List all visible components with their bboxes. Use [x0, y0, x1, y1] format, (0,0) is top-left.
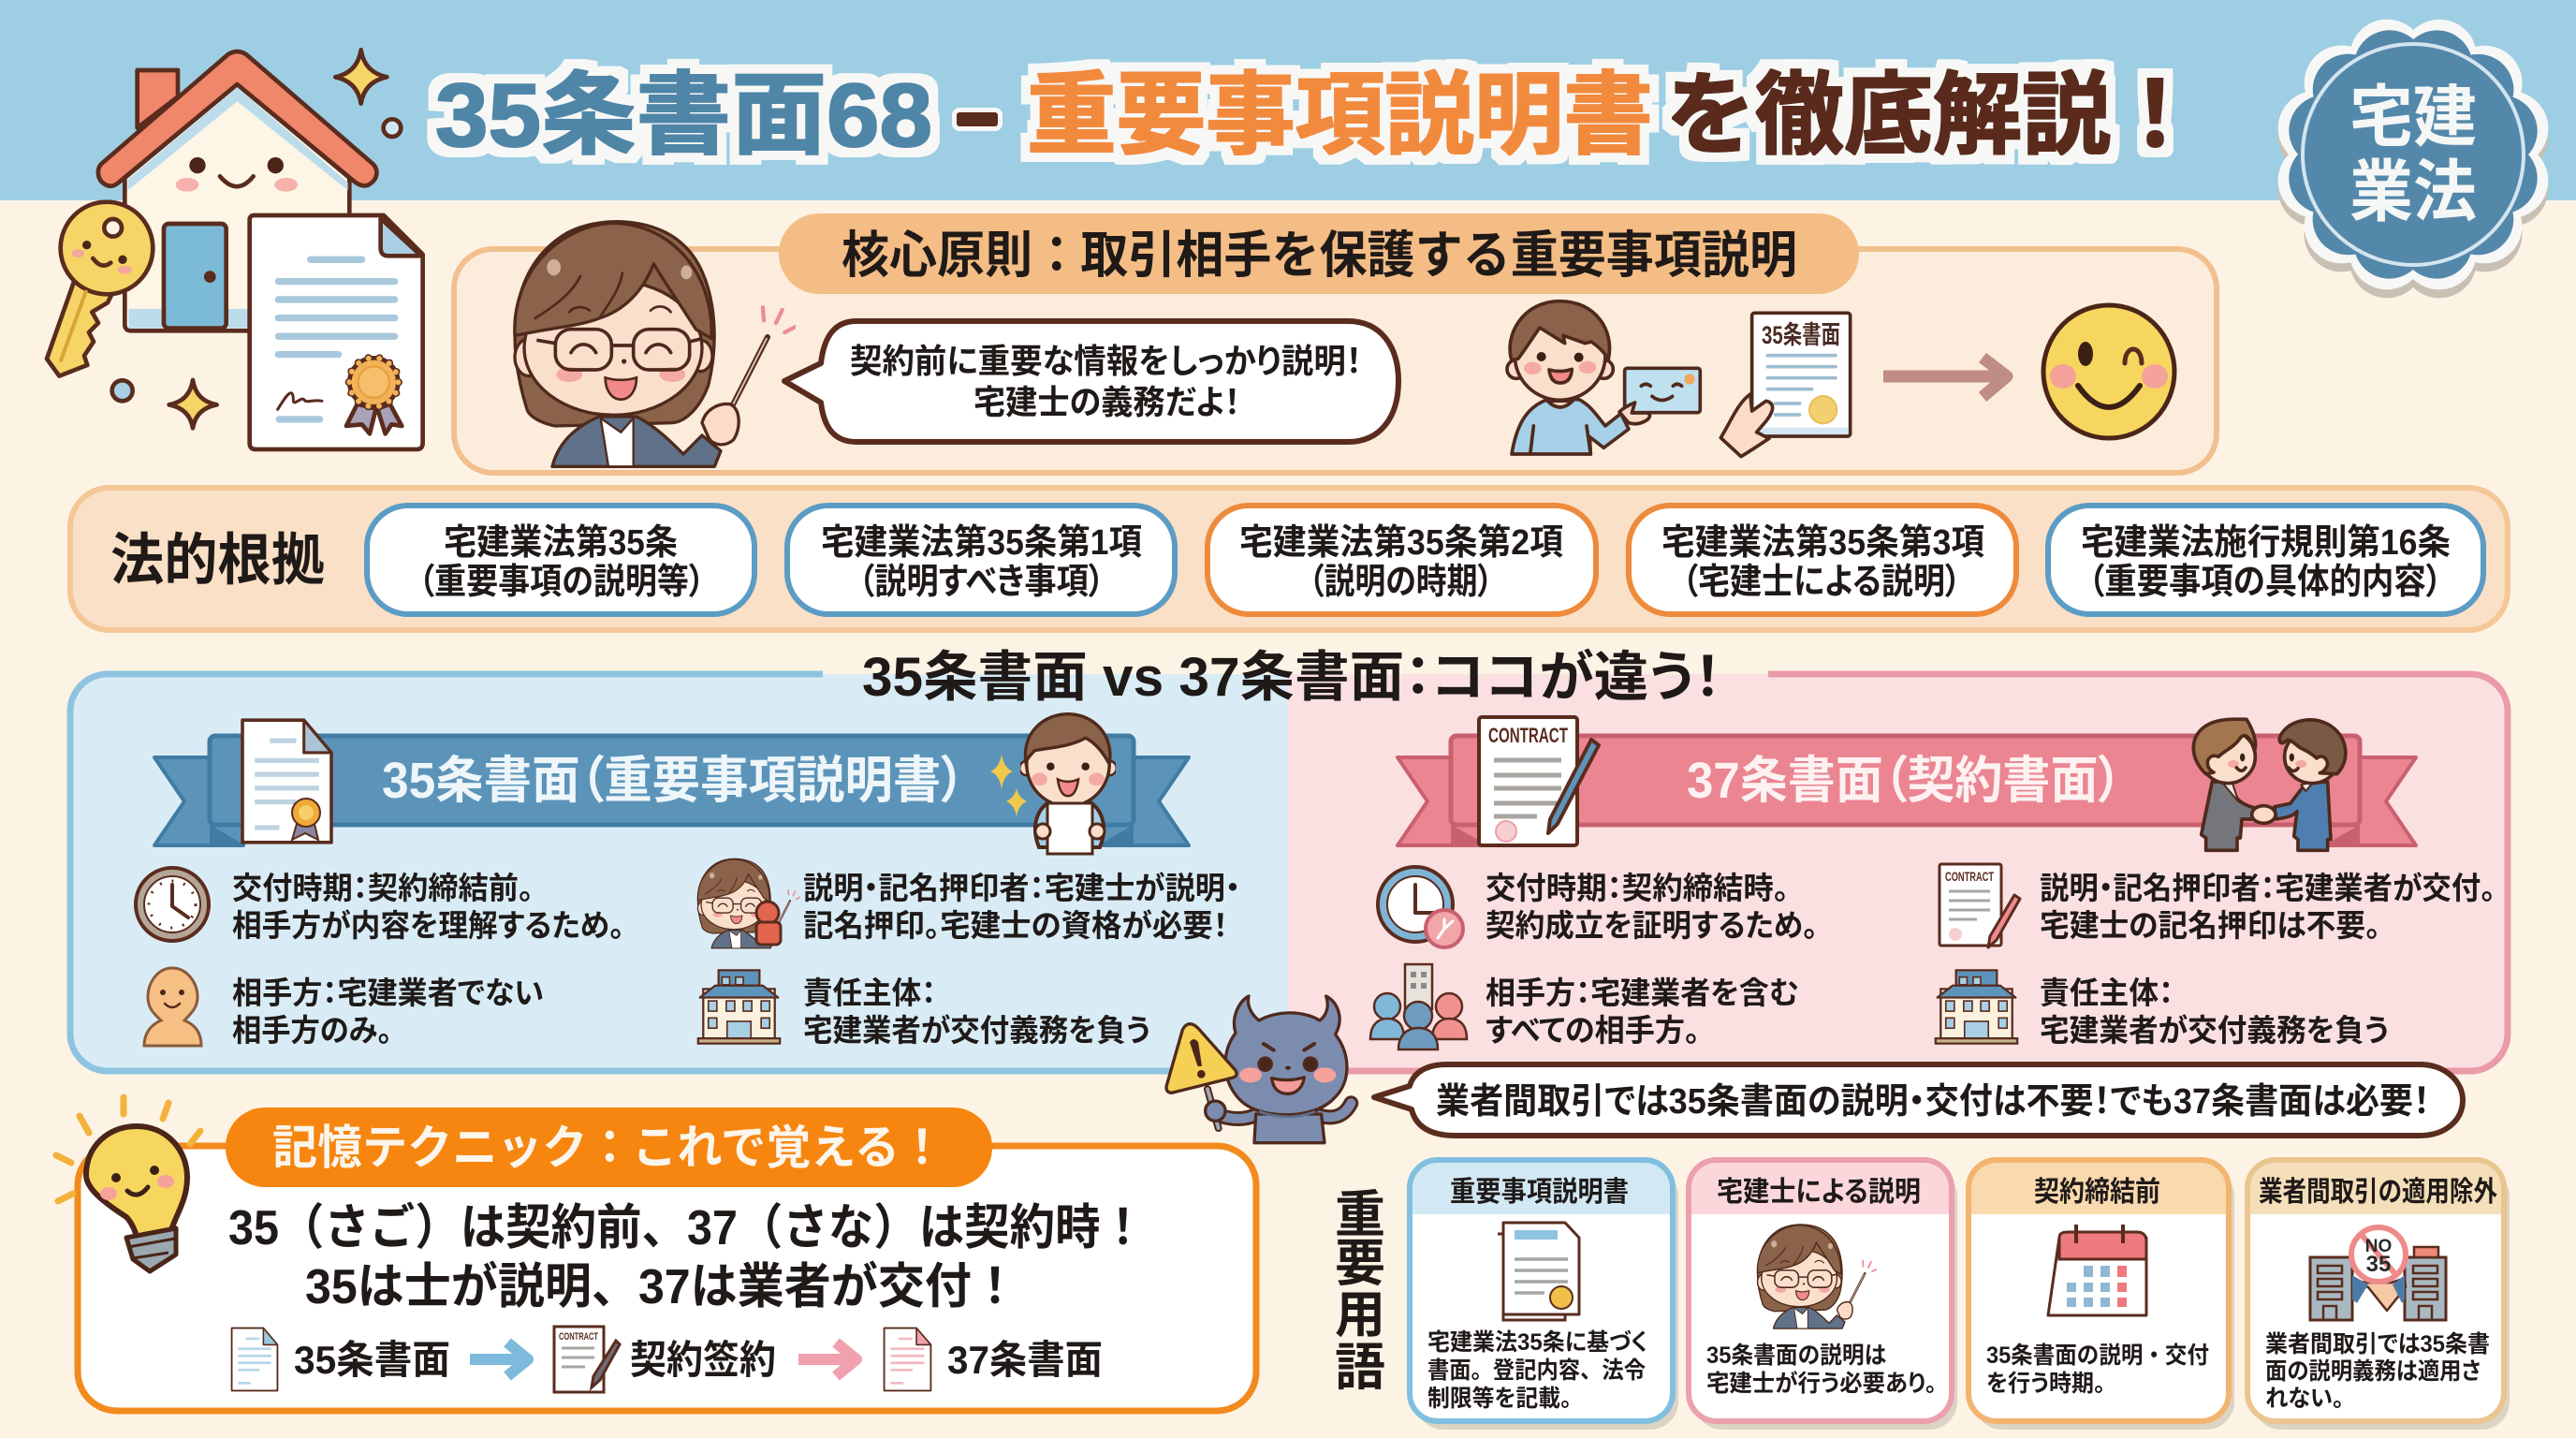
heading: comparison: 35条書面 vs 37条書面：ココが違う！ [862, 647, 1721, 708]
speech bubble: 宅建士の義務だよ！ [973, 383, 1240, 421]
icon: contract with pen [1479, 717, 1599, 845]
title: を徹底解説！ [1666, 66, 2200, 166]
text: definition: 制限等を記載。 [1427, 1386, 1572, 1412]
icon: document with rosette [242, 720, 331, 843]
icon: contract with pen: CONTRACT [559, 1331, 598, 1343]
speech bubble [784, 321, 1398, 442]
text: definition: 業者間取引では35条書 [2265, 1331, 2490, 1357]
card: 業者間取引の適用除外: 業者間取引の適用除外 [2259, 1177, 2497, 1208]
item: counterparty group: 相手方：宅建業者を含む [1486, 976, 1799, 1010]
sparkles [112, 50, 401, 428]
item: explainer and signer: 宅建士の記名押印は不要。 [2040, 908, 2380, 943]
icon: 37条書面 document [884, 1328, 932, 1391]
text: definition [1986, 1343, 2209, 1397]
card: 契約締結前 [1969, 1160, 2234, 1430]
chip: article 35-2 [1208, 506, 1596, 614]
panel: memory technique [78, 1108, 1256, 1411]
character: boy with paper [1019, 714, 1117, 854]
chip: article 35: 宅建業法第35条 [444, 523, 678, 563]
item: delivery timing [1378, 867, 1818, 947]
item: responsible party: 責任主体： [803, 976, 936, 1010]
chip: article 35-1: 宅建業法第35条第1項 [821, 523, 1142, 563]
character: teacher with pointer [515, 222, 796, 466]
text: mnemonic [228, 1201, 1146, 1314]
icon: light bulb [56, 1097, 200, 1271]
text: definition [2265, 1331, 2490, 1412]
icon: contract with pen: CONTRACT [1488, 724, 1568, 747]
chip: enforcement rule 16: （重要事項の具体的内容） [2088, 563, 2442, 602]
heading: key terms (vertical): 用 [1335, 1287, 1385, 1343]
character: handshake [2193, 719, 2346, 850]
chip: article 35-1: （説明すべき事項） [858, 563, 1105, 602]
arrow: blue [470, 1343, 528, 1376]
item: responsible party [698, 970, 1150, 1048]
icon: certificate document [250, 215, 423, 449]
title: 重要事項説明書 [1027, 66, 1653, 166]
item: responsible party: 責任主体： [2040, 976, 2174, 1010]
text: definition: 宅建業法35条に基づく [1427, 1329, 1647, 1356]
divider: center dashed line [1285, 689, 1291, 1002]
chip: article 35: （重要事項の説明等） [418, 563, 705, 602]
icon: smiling key [47, 202, 153, 376]
item: explainer and signer: 説明・記名押印者：宅建業者が交付。 [2040, 871, 2496, 905]
heading pill: core principle: 核心原則：取引相手を保護する重要事項説明 [842, 227, 1797, 284]
heading pill: memory technique [226, 1108, 992, 1187]
icon: contract with pen [554, 1327, 620, 1392]
item: delivery timing: 交付時期：契約締結前。 [232, 871, 534, 905]
icon: buildings, handshake and no-35 sign [2310, 1227, 2446, 1320]
text: definition: 宅建士が行う必要あり。 [1706, 1370, 1937, 1397]
icon: buildings, handshake and no-35 sign: 35 [2366, 1252, 2391, 1277]
text: definition: 書面。登記内容、法令 [1427, 1357, 1646, 1384]
icon: calendar [2048, 1225, 2146, 1315]
card: 契約締結前: 契約締結前 [2034, 1177, 2160, 1208]
card: 宅建士による説明: 宅建士による説明 [1717, 1177, 1921, 1208]
icon: official document [1498, 1223, 1579, 1320]
title: 35条書面68 [435, 66, 932, 166]
text: definition: れない。 [2265, 1386, 2344, 1412]
icon: 35条書面 document [230, 1328, 279, 1391]
chip: article 35-3 [1629, 506, 2016, 614]
icon: teacher [1757, 1225, 1877, 1328]
heading: key terms (vertical): 要 [1335, 1236, 1385, 1292]
panel: legal basis [70, 488, 2508, 630]
card: 宅建士による説明 [1689, 1160, 1957, 1430]
icon: smiley [2043, 305, 2174, 438]
header band [0, 0, 2576, 200]
chip: article 35-2: （説明の時期） [1309, 563, 1493, 602]
chip: article 35 [367, 506, 754, 614]
item: explainer and signer: 記名押印。宅建士の資格が必要！ [803, 908, 1228, 943]
speech bubble: 契約前に重要な情報をしっかり説明！ [850, 342, 1362, 380]
item: responsible party: 宅建業者が交付義務を負う [2040, 1013, 2389, 1048]
arrow: pink [798, 1343, 856, 1376]
flow: 35条書面 to contract to 37条書面: 契約签約 [630, 1338, 776, 1382]
text: definition [1427, 1329, 1647, 1412]
icon: 35条書面 document with hand: 35条書面 [1762, 321, 1840, 349]
item: counterparty: 相手方：宅建業者でない [232, 976, 544, 1010]
ribbon: 35条書面 heading: 35条書面（重要事項説明書） [382, 753, 965, 809]
item: counterparty: 相手方のみ。 [232, 1013, 392, 1048]
panel: 37条書面 [1288, 674, 2508, 1071]
item: responsible party [1936, 970, 2389, 1048]
item: delivery timing: 相手方が内容を理解するため。 [232, 908, 624, 943]
text: definition: 35条書面の説明・交付 [1986, 1343, 2209, 1369]
chip: article 35-1 [787, 506, 1175, 614]
text: mnemonic: 35（さご）は契約前、37（さな）は契約時！ [228, 1201, 1146, 1255]
card: 業者間取引の適用除外 [2247, 1160, 2510, 1430]
item: responsible party: 宅建業者が交付義務を負う [803, 1013, 1150, 1048]
badge: 宅建業法 seal: 業法 [2349, 155, 2477, 230]
badge: 宅建業法 seal [2277, 19, 2549, 290]
flow: 35条書面 to contract to 37条書面: 35条書面 [294, 1338, 450, 1382]
flow: 35条書面 to contract to 37条書面: 37条書面 [947, 1338, 1103, 1382]
icon: 35条書面 document with hand [1720, 313, 1851, 457]
ribbon: 35条書面 heading [154, 736, 1189, 845]
icon: buildings, handshake and no-35 sign: NO [2365, 1237, 2392, 1256]
heading: key terms (vertical): 重 [1335, 1187, 1385, 1243]
sparkles [990, 754, 1027, 816]
item: counterparty group [1370, 964, 1799, 1049]
item: delivery timing: 交付時期：契約締結時。 [1486, 871, 1789, 905]
heading: legal basis: 法的根拠 [110, 529, 325, 592]
text: definition: 面の説明義務は適用さ [2265, 1358, 2481, 1385]
heading: key terms (vertical): 語 [1335, 1340, 1385, 1396]
item: explainer and signer [697, 858, 1240, 948]
chip: article 35-3: 宅建業法第35条第3項 [1661, 523, 1984, 563]
panel: core principle [454, 213, 2217, 473]
callout: B2B exception: 業者間取引では35条書面の説明・交付は不要！でも37条書面は必要！ [1436, 1082, 2430, 1122]
chip: enforcement rule 16 [2048, 506, 2483, 614]
badge: 宅建業法 seal: 宅建 [2349, 81, 2477, 155]
title [435, 66, 2200, 166]
icon: smiling house [98, 51, 376, 330]
text: mnemonic: 35は士が説明、37は業者が交付！ [305, 1260, 1018, 1314]
ribbon: 37条書面 heading [1398, 736, 2416, 845]
heading pill: memory technique: 記憶テクニック：これで覚える！ [272, 1122, 944, 1174]
card: 重要事項説明書: 重要事項説明書 [1450, 1177, 1629, 1208]
item: delivery timing [136, 868, 624, 943]
text: definition [1706, 1343, 1937, 1397]
callout: B2B exception [1374, 1064, 2463, 1136]
text: definition: を行う時期。 [1986, 1371, 2105, 1397]
item: explainer and signer: 説明・記名押印者：宅建士が説明・ [803, 871, 1240, 905]
panel: 35条書面 [70, 674, 1288, 1071]
chip: enforcement rule 16: 宅建業法施行規則第16条 [2081, 523, 2451, 563]
chip: article 35-3: （宅建士による説明） [1682, 563, 1961, 602]
card: 重要事項説明書 [1410, 1160, 1678, 1430]
item: explainer and signer: CONTRACT [1945, 869, 1994, 884]
item: explainer and signer [1939, 864, 2496, 947]
ribbon: 37条書面 heading: 37条書面（契約書面） [1687, 753, 2122, 809]
item: counterparty [144, 968, 544, 1048]
chip: article 35-2: 宅建業法第35条第2項 [1239, 523, 1563, 563]
flow: 35条書面 to contract to 37条書面 [232, 1327, 1103, 1392]
item: counterparty group: すべての相手方。 [1486, 1013, 1700, 1048]
arrow: to happy customer [1883, 358, 2007, 397]
item: delivery timing: 契約成立を証明するため。 [1486, 908, 1818, 943]
heading pill: core principle [779, 213, 1859, 294]
text: definition: 35条書面の説明は [1706, 1343, 1886, 1369]
character: boy with card [1507, 301, 1700, 454]
character: devil with warning sign [1166, 996, 1351, 1143]
